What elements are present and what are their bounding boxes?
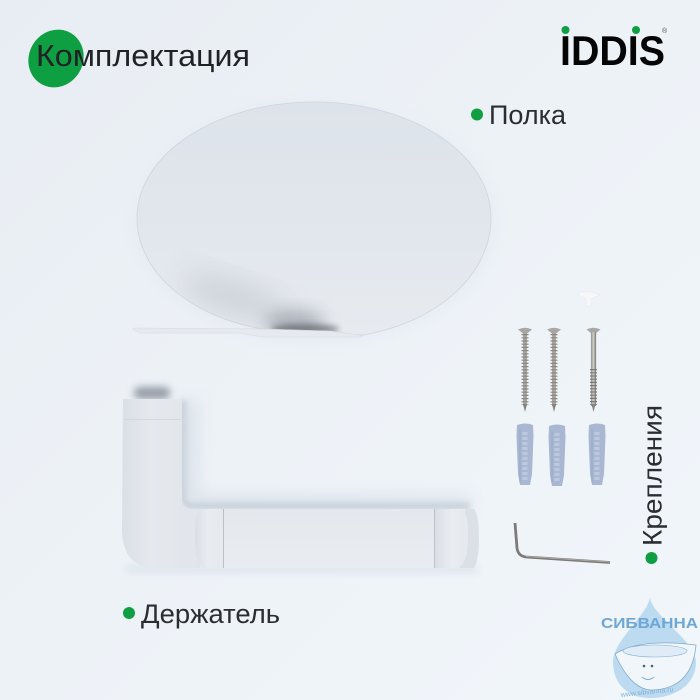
right sleeve	[435, 509, 468, 568]
logo: IDDIS: ®	[662, 27, 668, 35]
center bar	[224, 509, 434, 568]
logo: IDDIS: IDDIS	[560, 27, 665, 74]
water drop	[613, 597, 696, 698]
wall anchors	[516, 424, 606, 486]
shelf bracket strip	[133, 328, 363, 337]
screws	[518, 328, 600, 412]
bath	[615, 643, 696, 690]
holder shadows	[134, 387, 170, 399]
label: holder: Держатель	[141, 599, 280, 629]
site url: www.sibvanna.ru	[619, 686, 674, 699]
threaded end	[459, 509, 479, 568]
label: fasteners: Крепления	[638, 405, 668, 546]
left sleeve	[195, 509, 223, 568]
green blob	[18, 19, 94, 98]
shelf disc	[137, 102, 491, 335]
title	[18, 19, 250, 98]
hex key	[515, 523, 610, 562]
vertical arm with elbow	[122, 399, 200, 568]
shelf soft shadow	[136, 104, 496, 344]
shelf	[133, 102, 496, 344]
watermark logo	[601, 597, 698, 699]
label: shelf: Полка	[489, 100, 567, 130]
plastic cap	[577, 291, 600, 306]
holder	[122, 387, 479, 573]
title text: Комплектация	[36, 38, 250, 73]
brand text: СИБВАННА	[601, 615, 698, 632]
